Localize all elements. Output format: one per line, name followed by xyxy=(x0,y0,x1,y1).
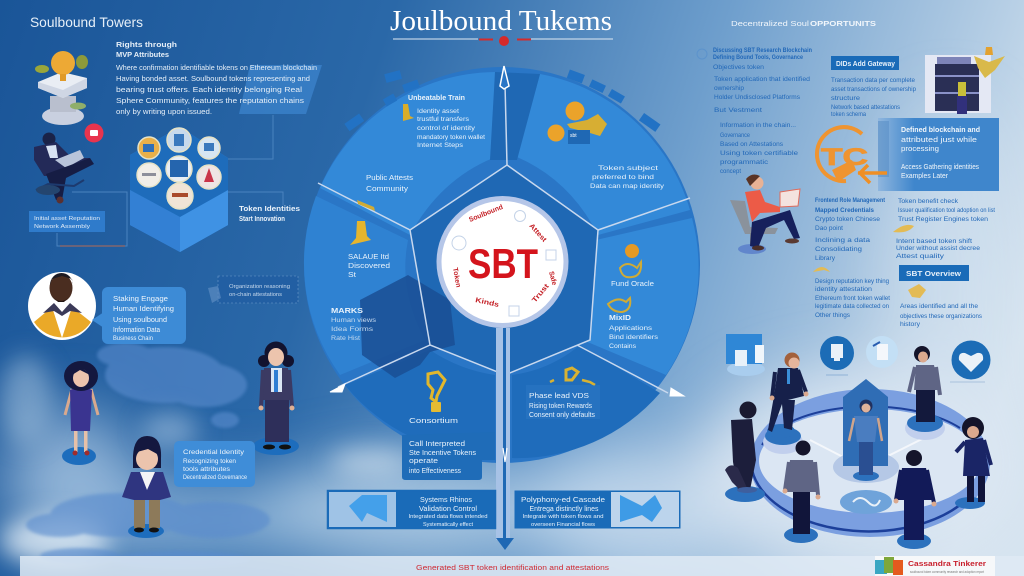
speech bubble: woman: Credential Identity xyxy=(183,449,245,456)
text block: lower right: history xyxy=(900,321,921,328)
left intro text block: Rights through xyxy=(116,42,177,49)
blue callout panel: Access Gathering identities xyxy=(901,162,979,171)
text block: middle of right column: Other things xyxy=(815,312,851,319)
person: man in suit xyxy=(767,352,808,438)
text block: middle of right column: Ethereum front token wallet xyxy=(815,295,890,302)
icon: checklist circle xyxy=(866,336,898,368)
text block: middle of right column: Consolidating xyxy=(815,246,862,253)
token medallions xyxy=(137,128,221,209)
segment text: right: Fund Oracle xyxy=(611,281,654,288)
text block: top middle: structure xyxy=(831,95,860,102)
bottom box: right: Integrate with token flows and xyxy=(522,514,604,520)
bottom box: left: Integrated data flows intended xyxy=(408,514,488,520)
text block: middle of right column: Library xyxy=(815,255,836,262)
footer logo xyxy=(875,556,995,576)
segment: bottom-left xyxy=(345,350,495,455)
person: man back view left xyxy=(782,440,820,543)
blue callout panel: Examples Later xyxy=(901,171,948,180)
segment text: lower-left xyxy=(331,308,377,342)
segment: right xyxy=(578,218,699,375)
speech bubble: avatar: Business Chain xyxy=(113,335,153,342)
segment: gold key and text xyxy=(526,368,600,419)
segment text: left: Discovered xyxy=(348,263,390,270)
icon: red badge xyxy=(84,124,104,142)
left intro text block: Where confirmation identifiable tokens on Ethereum blockchain xyxy=(116,65,317,72)
segment: gold key and text: Rising token Rewards xyxy=(529,401,592,410)
right column: list A: Token application that identified xyxy=(714,76,810,83)
icon: trophy on pedestal xyxy=(35,51,88,125)
text block: right bullets: Issuer qualification tool adoption on list xyxy=(898,207,995,214)
icon: gold coins: sbt xyxy=(570,133,577,139)
vertical arrow xyxy=(496,328,514,550)
centre SBT badge: Attest xyxy=(528,223,548,244)
icon: document circle xyxy=(820,336,854,375)
segment: gold key and text: Consent only defaults xyxy=(529,410,595,419)
text block: lower right xyxy=(900,284,983,328)
footer logo: Cassandra Tinkerer xyxy=(908,559,986,568)
segment text: upper-left: Community xyxy=(366,186,409,193)
central house with figure xyxy=(843,379,888,481)
segment text: top-right: Data can map identity xyxy=(590,183,665,190)
right column: list A: Discussing SBT Research Blockchain xyxy=(713,47,812,54)
blue label: top xyxy=(831,56,899,70)
right heading: OPPORTUNITS xyxy=(810,19,876,28)
text block: top middle: token schema xyxy=(831,111,866,118)
blue callout panel: processing xyxy=(901,144,939,153)
text block: middle of right column: identity attestation xyxy=(815,286,872,293)
speech bubble: avatar: Using soulbound xyxy=(113,317,167,324)
wheel base xyxy=(304,67,700,463)
text block: lower right: objectives these organizations xyxy=(900,313,983,320)
community ring xyxy=(750,389,990,537)
platforms xyxy=(763,414,945,454)
right column: list A: Information in the chain... xyxy=(720,122,796,129)
segment text: lower-left: MARKS xyxy=(331,308,363,315)
centre SBT badge: Trust xyxy=(531,282,551,304)
segment: top-right xyxy=(517,74,690,235)
segment text: left: SALAUE Itd xyxy=(348,254,389,261)
person: woman arms crossed xyxy=(122,436,171,538)
arrowheads xyxy=(330,66,684,396)
right column: list A: Holder Undisclosed Platforms xyxy=(714,94,801,101)
text block: right bullets: Trust Register Engines token xyxy=(898,216,988,223)
right column: list A: But Vestment xyxy=(714,107,762,114)
text block: middle of right column: Inclining a data xyxy=(815,237,870,244)
segment text: right: MixID xyxy=(609,315,631,322)
right column: list A: programmatic xyxy=(720,159,769,166)
text block: lower right: Areas identified and all the xyxy=(900,303,978,310)
text block: top middle: asset transactions of ownership xyxy=(831,86,916,93)
right heading xyxy=(731,19,876,28)
divider lines xyxy=(318,84,690,393)
decorative puzzle-cloud patches xyxy=(26,343,270,569)
person: man in grey top xyxy=(909,346,940,426)
person: crouching man left xyxy=(725,402,765,502)
text block: top middle: Network based attestations xyxy=(831,104,901,111)
segment text: top-left: trustful transfers xyxy=(417,116,470,123)
segment text: top-right xyxy=(590,165,665,190)
speech bubble: avatar: Staking Engage xyxy=(113,296,168,303)
person: woman right xyxy=(955,417,991,509)
centre SBT badge: SBT xyxy=(468,240,538,287)
segment text: upper-left: Public Attests xyxy=(366,175,414,182)
bottom box: right: Entrega distinctly lines xyxy=(530,506,599,513)
consortium text box: Ste Incentive Tokens xyxy=(409,450,477,457)
consortium text box: into Effectiveness xyxy=(409,468,461,475)
person: man with laptop in chair xyxy=(730,175,800,254)
segment text: top-right: preferred to bind xyxy=(592,174,654,181)
segment text: top-left: Identity asset xyxy=(417,108,459,115)
caption box: Network Assembly xyxy=(34,224,90,230)
text block: right bullets: Token benefit check xyxy=(898,198,959,205)
blue label: top: DIDs Add Gateway xyxy=(836,61,895,68)
segment text: top-left: Unbeatable Train xyxy=(408,95,465,102)
segment text: lower-left: Rate Hist xyxy=(331,335,360,342)
left intro text block: Having bonded asset. Soulbound tokens representing and xyxy=(116,76,310,83)
icon: heart circle xyxy=(950,340,990,382)
speech bubble: avatar xyxy=(92,287,186,344)
icon: orange token seal: TC xyxy=(821,144,868,171)
icon: orange arrow xyxy=(858,165,887,183)
segment: bottom-right xyxy=(512,345,660,458)
bottom box: left: Validation Control xyxy=(419,506,477,513)
segment: community key icon xyxy=(409,372,458,425)
blue label: lower xyxy=(899,265,969,281)
text block: middle of right column: Mapped Credentials xyxy=(815,207,874,214)
right column: list A: Using token certifiable xyxy=(720,150,798,157)
cube label: Start Innovation xyxy=(239,216,285,223)
right heading: Decentralized Soul xyxy=(731,21,810,28)
centre SBT badge: Token xyxy=(451,267,461,288)
segment text: top-left xyxy=(403,95,485,149)
person: man back view right xyxy=(894,450,936,549)
segment text: lower-left: Human views xyxy=(331,317,377,324)
person: woman in dark suit xyxy=(253,342,299,455)
caption box xyxy=(29,211,105,232)
person: woman in purple dress xyxy=(62,361,98,465)
bottom box: right: overseen Financial flows xyxy=(531,522,595,528)
caption box: Initial asset Reputation xyxy=(34,216,100,222)
shadow patch xyxy=(360,275,455,378)
connector lines xyxy=(57,115,283,246)
text block: right bullets: Attest quality xyxy=(896,253,945,260)
segment: gold key and text: Phase lead VDS xyxy=(529,391,589,400)
speech bubble: woman: tools attributes xyxy=(183,466,231,473)
segment text: top-left: Internet Steps xyxy=(417,142,464,149)
bottom box: left: Systems Rhinos xyxy=(420,497,473,504)
text block: right bullets xyxy=(893,198,995,260)
bottom box: right: Polyphony-ed Cascade xyxy=(521,497,605,504)
circular wheel diagram xyxy=(304,66,700,463)
speech bubble: woman xyxy=(174,441,255,487)
segment text: lower-left: Idea Forms xyxy=(331,326,374,333)
segment text: upper-left xyxy=(357,175,414,211)
left intro text block: MVP Attributes xyxy=(116,52,169,59)
segment: top-left xyxy=(320,72,495,235)
centre SBT badge: Soulbound xyxy=(468,204,504,224)
right column: list A xyxy=(697,47,812,175)
left intro text block xyxy=(116,42,322,116)
blue callout panel: Defined blockchain and xyxy=(901,125,980,134)
segment text: right: Applications xyxy=(609,325,653,332)
right column: list A: Objectives token xyxy=(713,64,764,71)
icon: orange token seal xyxy=(817,127,868,182)
person seated with laptop xyxy=(34,132,94,204)
text block: middle of right column xyxy=(813,197,890,319)
speech bubble: woman: Decentralized Governance xyxy=(183,474,247,481)
icon: documents panel xyxy=(726,334,765,376)
consortium text box: operate xyxy=(409,458,438,465)
main title: Joulbound Tukems xyxy=(390,6,612,37)
text block: middle of right column: Crypto token Chinese xyxy=(815,216,880,223)
bottom box: right xyxy=(514,490,680,528)
segment text: right: Bind identifiers xyxy=(609,334,659,341)
text block: top middle xyxy=(831,77,916,118)
rim notch tabs xyxy=(344,70,660,132)
right column: list A: ownership xyxy=(714,85,744,92)
text block: middle of right column: legitimate data collected on xyxy=(815,303,889,310)
text block: middle of right column: Design reputation key thing xyxy=(815,278,889,285)
centre SBT badge: Kinds xyxy=(475,297,500,309)
segment text: top-right: Token subject xyxy=(598,165,658,172)
speech bubble: woman: Recognizing token xyxy=(183,458,236,465)
text block: right bullets: Intent based token shift xyxy=(896,238,972,245)
blue callout panel xyxy=(878,118,999,191)
segment text: left: St xyxy=(348,272,356,279)
speech bubble: avatar: Information Data xyxy=(113,327,160,334)
footer logo: soulbound token community research and adoption report xyxy=(910,570,984,574)
cube label: Token Identities xyxy=(239,206,300,213)
isometric token cube xyxy=(130,127,228,252)
segment text: top-left: mandatory token wallet xyxy=(417,134,485,141)
bottom box: left xyxy=(328,490,496,528)
consortium text box: Call Interpreted xyxy=(409,441,465,448)
bottom box: left: Systematically effect xyxy=(423,522,473,528)
footer strip: Generated SBT token identification and attestations xyxy=(416,565,610,572)
footer strip xyxy=(20,556,1024,576)
left heading: Soulbound Towers xyxy=(30,15,143,30)
text block: right bullets: Under without assist decree xyxy=(896,245,980,252)
blue label: lower: SBT Overview xyxy=(906,271,962,278)
right column: list A: Governance xyxy=(720,132,750,139)
blue callout panel: attributed just while xyxy=(901,135,977,144)
right column: list A: concept xyxy=(720,168,741,175)
illustration: building with star xyxy=(925,47,1005,114)
dashed note box xyxy=(208,276,298,303)
text block: middle of right column: Dao point xyxy=(815,225,843,232)
left intro text block: Sphere Community, features the reputation chains xyxy=(116,98,305,105)
segment text: top-left: control of identity xyxy=(417,125,476,132)
right column: list A: Defining Bound Tools, Governance xyxy=(713,54,803,61)
right column: list A: Based on Attestations xyxy=(720,141,784,148)
centre SBT badge xyxy=(436,196,568,328)
segment text: right xyxy=(608,244,659,350)
inner hexagon xyxy=(410,165,598,375)
consortium text box xyxy=(402,432,495,480)
segment text: right: Contains xyxy=(609,343,637,350)
cube label xyxy=(239,206,300,223)
dashed note box: Organization reasoning xyxy=(229,284,290,290)
dashed note box: on-chain attestations xyxy=(229,292,282,298)
segment: left xyxy=(304,196,425,375)
speech bubble: avatar: Human Identifying xyxy=(113,306,174,313)
icon: gold coins xyxy=(548,102,607,144)
text block: top middle: Transaction data per complete xyxy=(831,77,915,84)
text block: middle of right column: Frontend Role Management xyxy=(815,197,886,204)
avatar: man with yellow jacket xyxy=(28,272,96,340)
left intro text block: only by writing upon issued. xyxy=(116,109,212,116)
segment: community key icon: Consortium xyxy=(409,416,458,425)
left intro text block: bearing trust offers. Each identity belonging Real xyxy=(116,87,303,94)
centre SBT badge: Safe xyxy=(547,271,557,286)
segment text: left xyxy=(348,221,390,279)
